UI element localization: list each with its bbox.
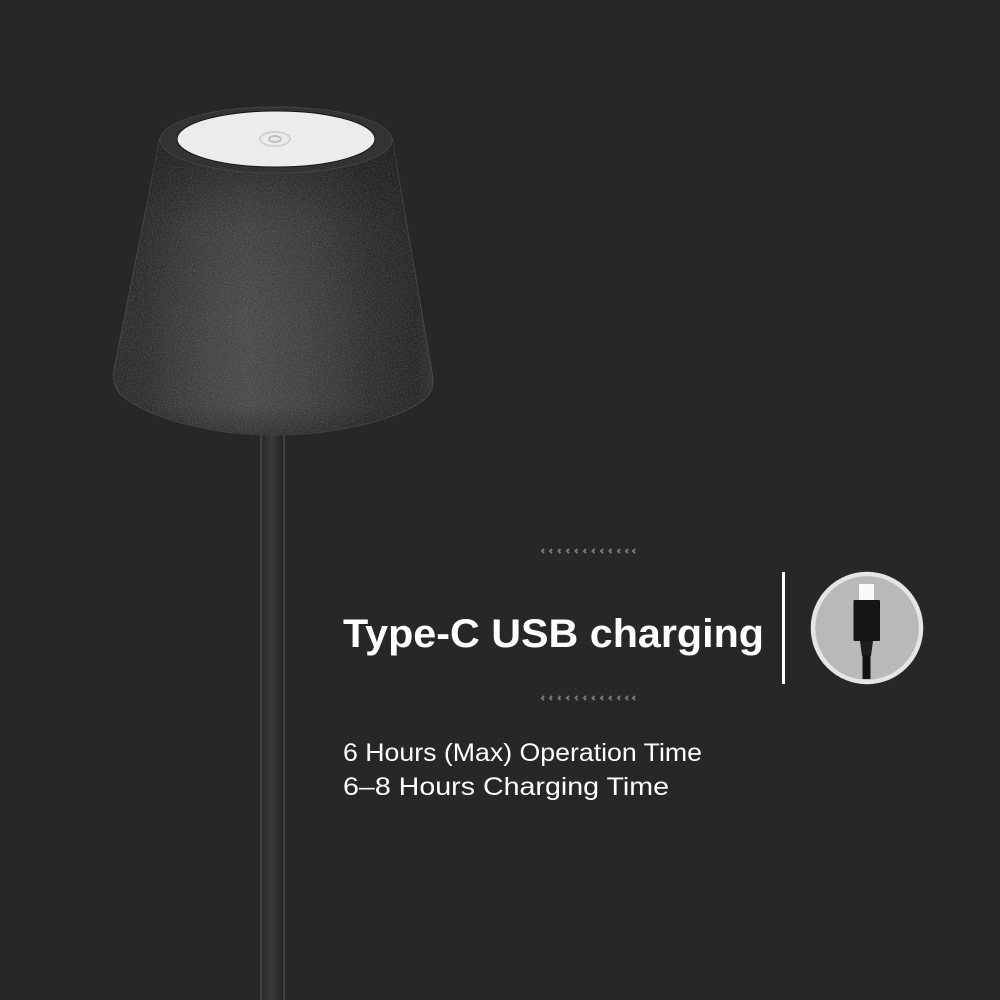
icon badge [813,574,921,682]
top dotted divider [542,549,635,553]
lamp shade [113,138,433,435]
lamp [113,107,433,1000]
lamp stem [260,430,285,1000]
touch button icon [260,132,290,146]
lamp top light [177,111,375,167]
connector metal tip [859,584,874,601]
icon: USB-C connector [813,574,921,682]
heading: Type-C USB charging [343,612,764,656]
operation time text: 6 Hours (Max) Operation Time [343,739,702,767]
bottom dotted divider [542,696,635,700]
cable [862,655,870,679]
connector body [854,600,880,641]
vertical divider [782,572,785,684]
charging time text: 6–8 Hours Charging Time [343,773,669,801]
connector strain relief [860,641,873,656]
lamp top rim [160,107,392,173]
